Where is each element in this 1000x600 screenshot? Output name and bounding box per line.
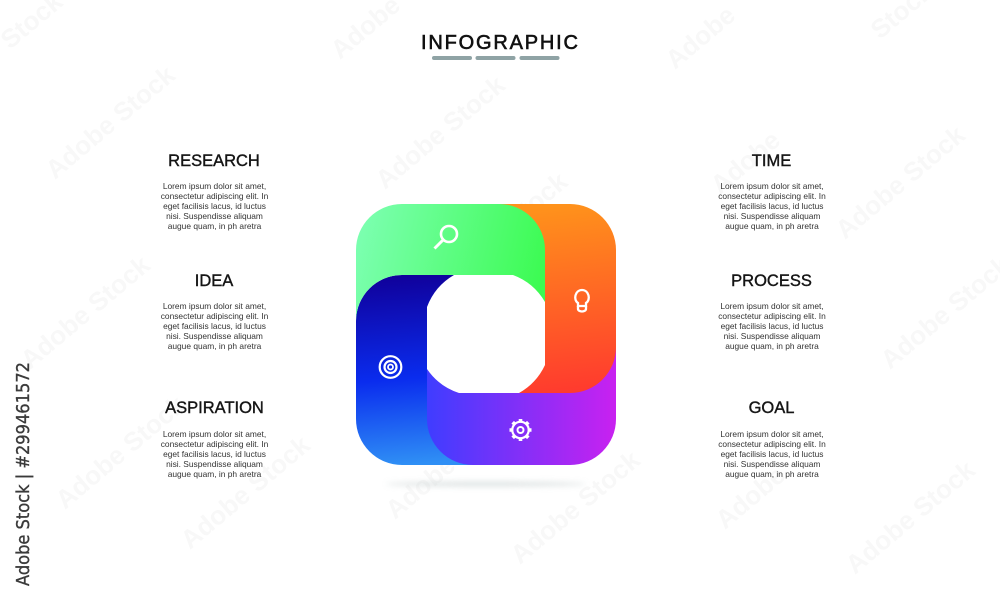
block: aspiration: nisi. Suspendisse aliquam xyxy=(166,459,263,469)
block: process: eget facilisis lacus, id luctus xyxy=(721,321,823,331)
block: time: augue quam, in ph aretra xyxy=(725,221,819,231)
block: goal: Lorem ipsum dolor sit amet, xyxy=(720,429,824,439)
watermark pattern: Stock xyxy=(500,166,574,235)
block: idea: augue quam, in ph aretra xyxy=(168,341,262,351)
block: time: eget facilisis lacus, id luctus xyxy=(721,201,823,211)
block: goal: GOAL xyxy=(749,399,794,417)
block: idea: IDEA xyxy=(195,272,233,290)
icon: target xyxy=(380,356,401,378)
centre hole xyxy=(427,275,545,393)
block: idea: Lorem ipsum dolor sit amet, xyxy=(163,301,266,311)
block: idea xyxy=(161,272,269,351)
block: time: Lorem ipsum dolor sit amet, xyxy=(720,181,824,191)
block: research xyxy=(161,152,269,231)
block: process: consectetur adipiscing elit. In xyxy=(718,311,826,321)
block: aspiration: ASPIRATION xyxy=(165,399,264,417)
block: goal: nisi. Suspendisse aliquam xyxy=(724,459,820,469)
block: process: Lorem ipsum dolor sit amet, xyxy=(720,301,824,311)
block: aspiration: augue quam, in ph aretra xyxy=(168,469,262,479)
watermark pattern: Adobe xyxy=(705,125,786,200)
watermark pattern: Adobe Stock xyxy=(40,59,181,185)
watermark pattern: Adobe Stock xyxy=(840,454,981,580)
block: goal: augue quam, in ph aretra xyxy=(725,469,819,479)
block: aspiration xyxy=(161,399,269,479)
block: research: Lorem ipsum dolor sit amet, xyxy=(163,181,266,191)
block: idea: nisi. Suspendisse aliquam xyxy=(166,331,263,341)
block: process: augue quam, in ph aretra xyxy=(725,341,819,351)
stock credit: Adobe Stock | #299461572 xyxy=(14,362,34,586)
segment: green xyxy=(356,204,545,321)
block: time xyxy=(718,152,826,231)
title underline bars xyxy=(432,56,560,60)
icon: gear xyxy=(510,419,532,441)
watermark pattern: Adobe Stock xyxy=(830,119,971,245)
block: time: consectetur adipiscing elit. In xyxy=(718,191,826,201)
block: process: nisi. Suspendisse aliquam xyxy=(724,331,820,341)
icon: light bulb xyxy=(575,290,589,312)
watermark pattern: Adobe Stock xyxy=(15,249,156,375)
icon: magnifier xyxy=(434,226,457,248)
segment: purple xyxy=(427,340,616,465)
block: research: nisi. Suspendisse aliquam xyxy=(166,211,263,221)
block: goal xyxy=(718,399,826,479)
watermark pattern: Adobe xyxy=(660,0,741,75)
segment: blue xyxy=(356,275,480,465)
block: process xyxy=(718,272,826,351)
central rounded square diagram xyxy=(356,204,616,465)
block: process: PROCESS xyxy=(731,272,812,290)
block: research: RESEARCH xyxy=(168,152,260,170)
block: aspiration: eget facilisis lacus, id luctus xyxy=(163,449,266,459)
watermark pattern: Adobe Stock xyxy=(370,69,511,195)
block: goal: eget facilisis lacus, id luctus xyxy=(721,449,823,459)
watermark pattern: Adobe Stock xyxy=(50,389,191,515)
block: aspiration: consectetur adipiscing elit. In xyxy=(161,439,269,449)
ground shadow xyxy=(386,482,586,486)
watermark pattern: Adobe Stock xyxy=(175,429,316,555)
watermark pattern: Adobe xyxy=(710,460,791,535)
watermark pattern: Adobe xyxy=(380,450,461,525)
block: research: consectetur adipiscing elit. In xyxy=(161,191,269,201)
block: time: TIME xyxy=(752,152,791,170)
block: goal: consectetur adipiscing elit. In xyxy=(718,439,826,449)
block: idea: consectetur adipiscing elit. In xyxy=(161,311,269,321)
block: aspiration: Lorem ipsum dolor sit amet, xyxy=(163,429,266,439)
segment: orange xyxy=(490,204,616,393)
block: research: eget facilisis lacus, id luctus xyxy=(163,201,266,211)
block: time: nisi. Suspendisse aliquam xyxy=(724,211,820,221)
watermark pattern: Adobe Stock xyxy=(505,444,646,570)
block: research: augue quam, in ph aretra xyxy=(168,221,262,231)
title: INFOGRAPHIC xyxy=(421,32,578,54)
block: idea: eget facilisis lacus, id luctus xyxy=(163,321,266,331)
